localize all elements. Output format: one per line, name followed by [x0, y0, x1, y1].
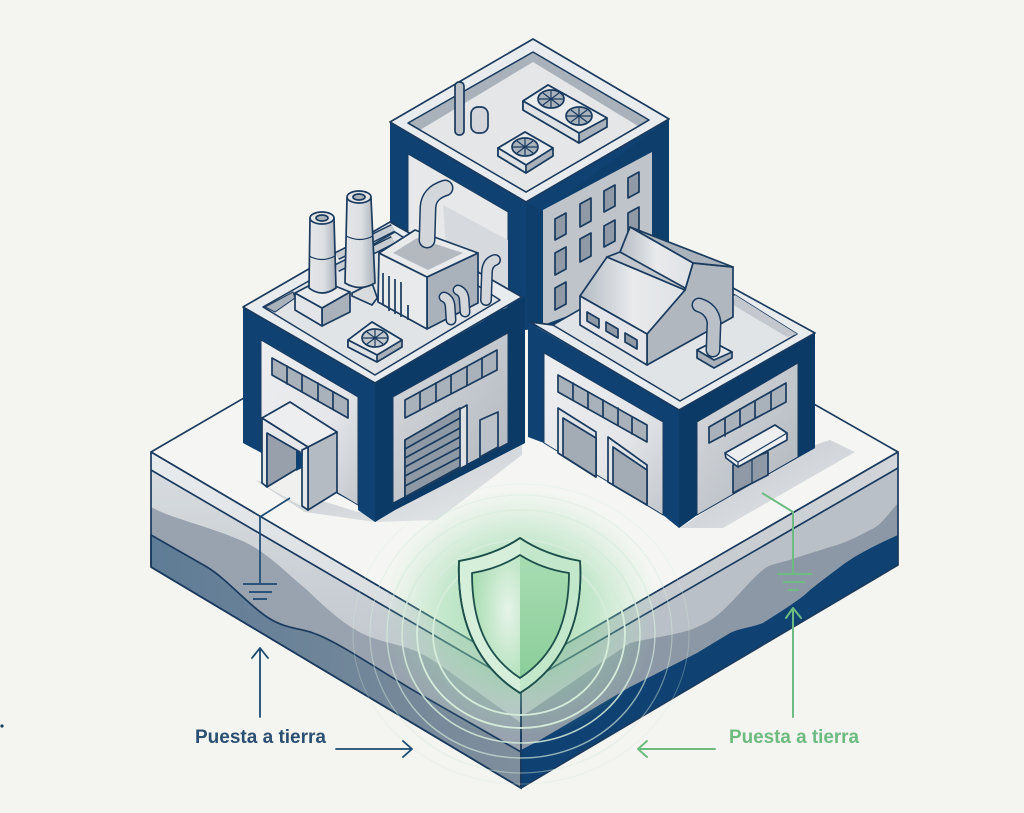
- ground showing through the opening: [262, 440, 308, 510]
- back pipes: [337, 228, 393, 268]
- grounding symbol: right: [762, 493, 812, 590]
- left block roof: [243, 222, 522, 383]
- building shadows: [255, 440, 855, 528]
- entrance door and canopy: [725, 425, 787, 493]
- ground top surface: [151, 237, 898, 670]
- right block structure: [528, 322, 815, 528]
- right label: vertical arrow: [786, 608, 801, 717]
- machine side pipes: [486, 260, 495, 300]
- tower roof: [390, 39, 669, 202]
- concentric rings: [353, 484, 689, 784]
- side door: [480, 412, 498, 457]
- roof exhaust pipe: [697, 305, 732, 368]
- rooftop fan: [348, 322, 402, 362]
- building: right block: [528, 227, 815, 528]
- garage doors: [558, 408, 647, 505]
- left label: horizontal arrow: [336, 741, 412, 757]
- window band left: [272, 358, 348, 418]
- right block roof: [530, 275, 815, 410]
- small dot: [0, 724, 4, 728]
- ground block: [151, 237, 898, 788]
- window band right: [709, 383, 786, 443]
- shield glow: [380, 487, 660, 737]
- left block structure: [243, 297, 525, 522]
- roller door: [405, 405, 467, 497]
- right soil face: [521, 452, 898, 788]
- building: top tower: [390, 39, 669, 330]
- window band right: [405, 350, 497, 418]
- double fan unit: [523, 85, 607, 143]
- tower windows: [555, 172, 639, 310]
- machine top pipe: [427, 188, 445, 240]
- right label text: Puesta a tierra: [729, 727, 859, 748]
- chimney back: [345, 191, 378, 305]
- left label: vertical arrow: [252, 648, 268, 717]
- building: left block: [243, 188, 525, 522]
- shield icon: [459, 538, 580, 693]
- tower walls: [390, 119, 669, 330]
- entrance canopy: [262, 402, 337, 510]
- roof tank: [471, 107, 488, 133]
- ground edge lines: [151, 452, 898, 788]
- roof house: [580, 227, 733, 365]
- roof vent pipe: [455, 82, 464, 135]
- left soil face: [151, 452, 521, 788]
- process machine: [378, 188, 495, 329]
- left label text: Puesta a tierra: [195, 727, 326, 748]
- single fan unit: [498, 132, 553, 173]
- window band left: [558, 375, 647, 442]
- right label: horizontal arrow: [638, 741, 715, 757]
- chimney front: [295, 212, 350, 326]
- grounding symbol: left: [243, 498, 290, 599]
